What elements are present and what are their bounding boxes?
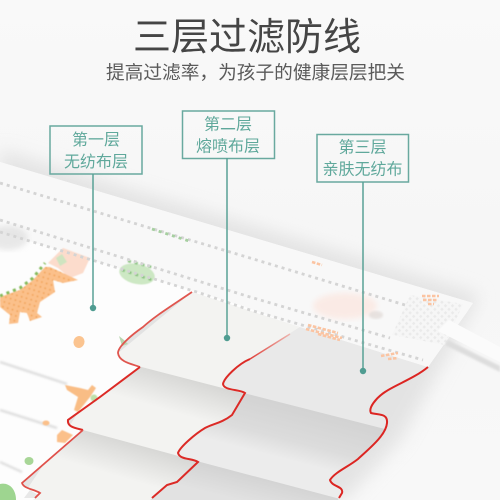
ear seal patch: [392, 295, 463, 345]
callout: third layer: [317, 134, 408, 374]
panel: third layer, skin-friendly fabric: [150, 394, 384, 500]
red edge: first layer: [22, 292, 192, 498]
icon: pale pink print: [313, 293, 383, 319]
fold shadow: [119, 366, 244, 416]
callout: third layer: 亲肤无纺布: [322, 160, 403, 178]
peach print patches: [306, 262, 439, 359]
callout: first layer: 第一层: [72, 131, 120, 149]
icon: green sprout print: [119, 336, 128, 346]
subtitle: 提高过滤率，为孩子的健康层层把关: [106, 62, 405, 83]
red edge: second layer: [152, 359, 250, 498]
fold shadow: [212, 394, 384, 462]
icon: orange dinosaur lower: [42, 385, 98, 443]
gray smudge print: [0, 226, 28, 250]
icon: orange dinosaur: [0, 248, 90, 324]
callout: third layer: 第三层: [338, 138, 387, 156]
callout: first layer: [50, 126, 142, 311]
icon: orange spot: [72, 334, 86, 350]
callout: first layer: 无纺布层: [64, 153, 128, 171]
red edge: third layer: [330, 367, 428, 498]
panel: first layer, printed non-woven: [0, 162, 473, 500]
callout: second layer: 熔喷布层: [196, 138, 260, 156]
title: 三层过滤防线: [133, 17, 361, 59]
upper mask band: [0, 162, 473, 367]
callout: second layer: 第二层: [204, 116, 252, 134]
icon: green spots lower: [0, 457, 38, 500]
stitch rows: [0, 183, 423, 360]
callout: second layer: [182, 111, 274, 341]
icon: green leaf print: [117, 260, 157, 288]
panel: second layer, melt-blown fabric: [20, 292, 300, 500]
icon: ear strap: [438, 320, 500, 372]
fold lines: [0, 362, 67, 472]
mask body: [0, 162, 473, 500]
stitch colour accents: [152, 229, 192, 242]
